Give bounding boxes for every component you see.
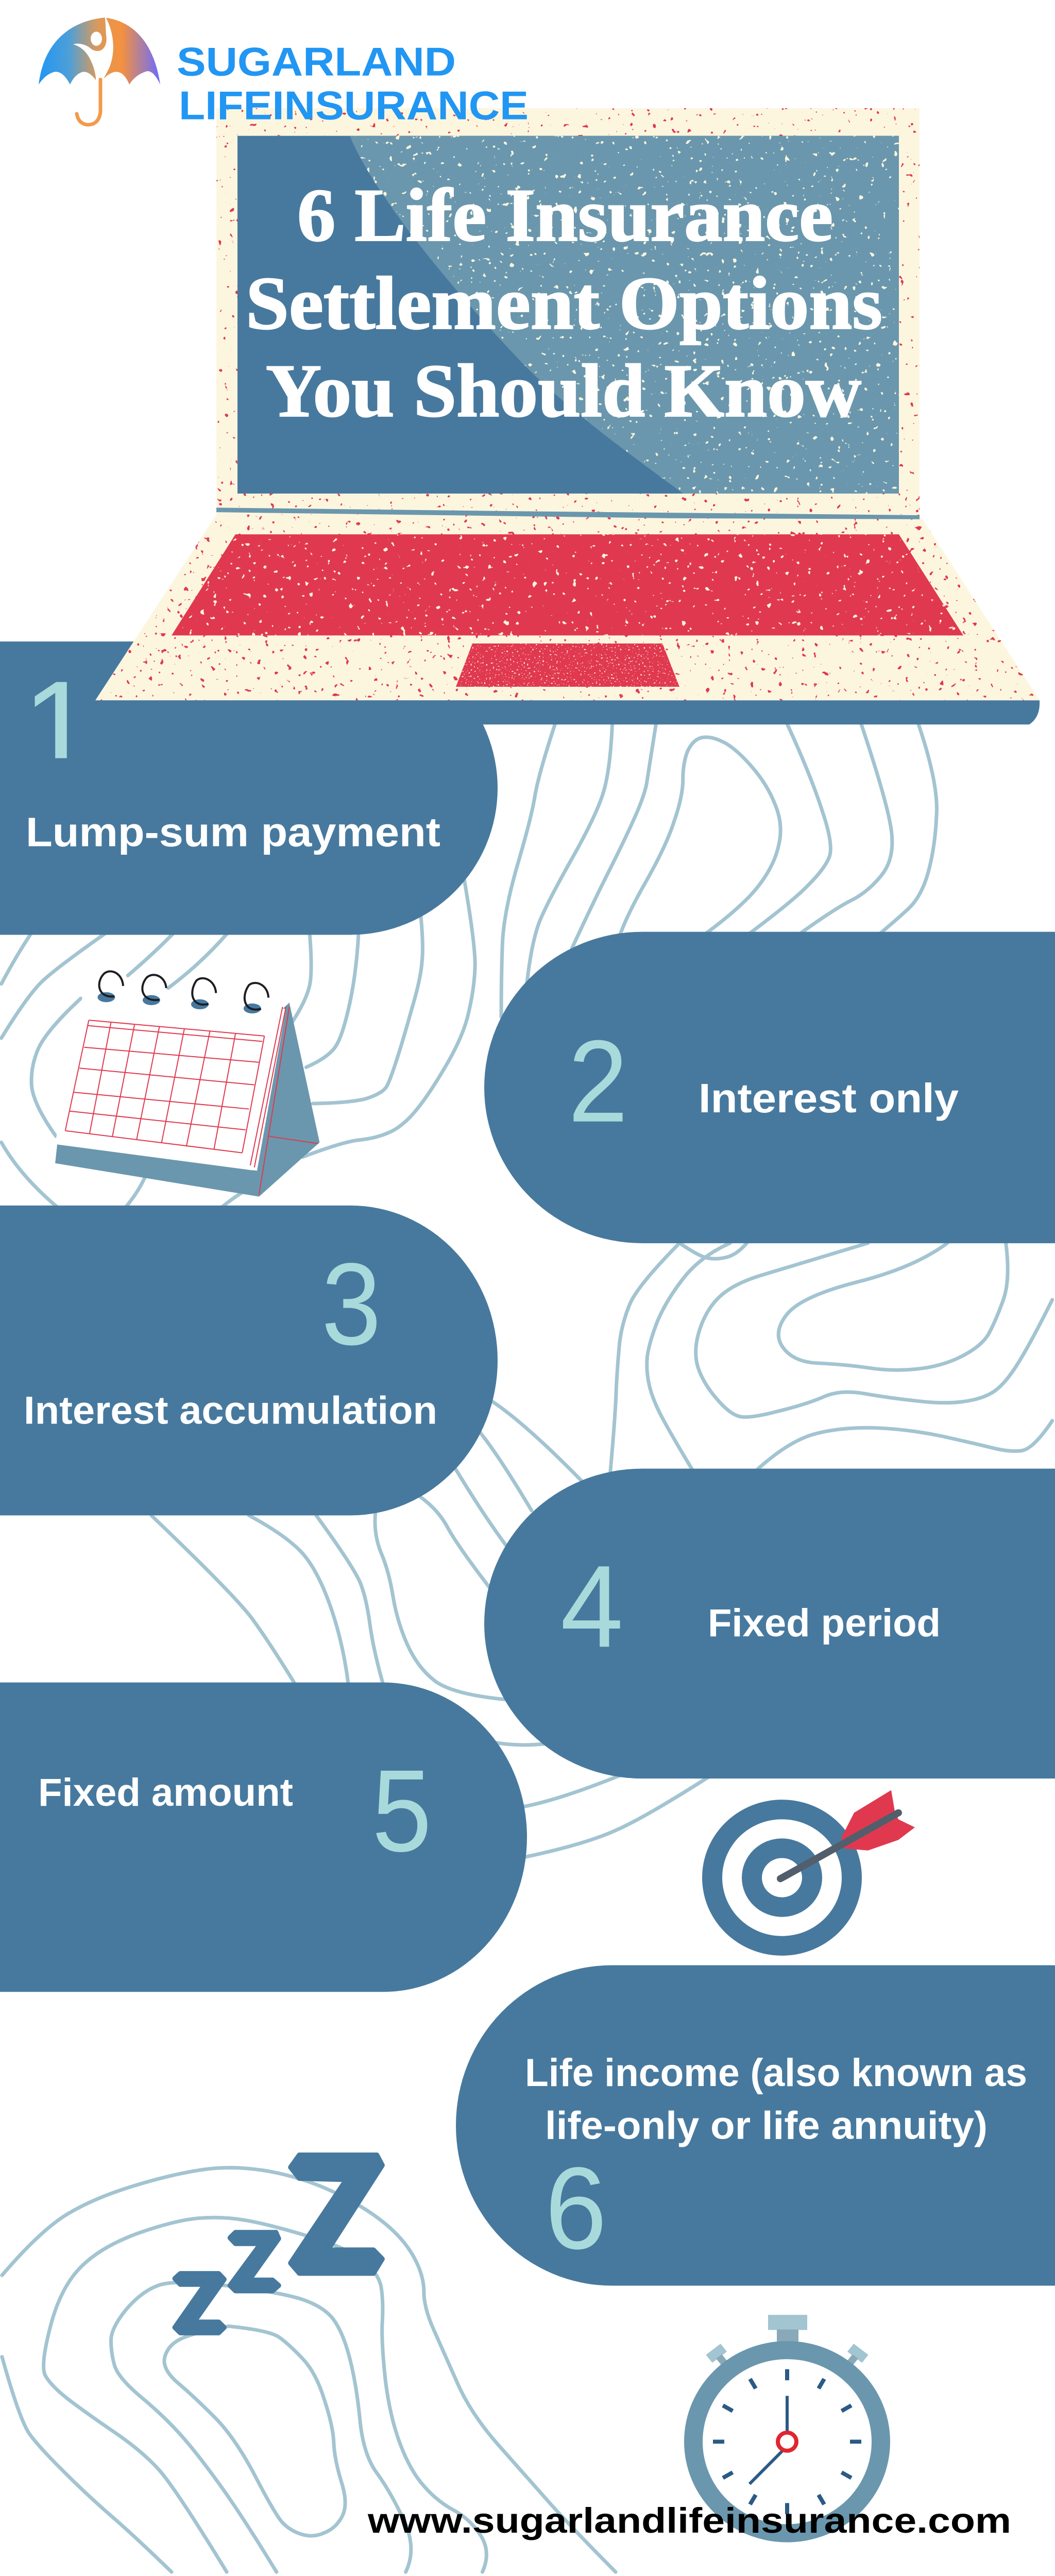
- stopwatch top button: [768, 2315, 807, 2330]
- number 4: 4: [560, 1541, 623, 1672]
- trackpad texture: [456, 643, 679, 687]
- stopwatch centre: [778, 2433, 796, 2451]
- calendar stand base: [55, 1144, 259, 1197]
- title line 2: Settlement Options: [246, 262, 882, 345]
- red speckles on base: [95, 515, 1040, 700]
- icon: umbrella with figure: [39, 15, 160, 125]
- panel 4: fixed period: [484, 1469, 1055, 1778]
- cream speckles on screen highlight: [350, 136, 899, 494]
- stopwatch side buttons: [706, 2344, 869, 2371]
- decorative contour lines: [2, 724, 1052, 2572]
- title: [246, 174, 882, 433]
- arrow fletching: [841, 1790, 915, 1851]
- logo: [39, 15, 529, 128]
- stopwatch ticks: [713, 2369, 861, 2514]
- number 1: 1: [22, 655, 95, 798]
- label: life income line 1: Life income (also known as: [525, 2051, 1027, 2095]
- cream speckles on keyboard: [172, 534, 963, 635]
- calendar stand side: [252, 1003, 319, 1197]
- icon: sleeping zzz: [175, 2155, 382, 2333]
- label: interest only: Interest only: [699, 1076, 959, 1122]
- label: fixed amount: Fixed amount: [38, 1771, 293, 1815]
- panel 1: lump-sum payment: [0, 641, 498, 935]
- laptop lid: [216, 108, 920, 518]
- number 5: 5: [372, 1745, 432, 1876]
- screen highlight: [350, 136, 899, 494]
- panel 6: life income: [456, 1965, 1055, 2286]
- icon: stopwatch: [684, 2315, 890, 2543]
- title line 3: You Should Know: [266, 349, 861, 433]
- laptop illustration: [93, 108, 1040, 724]
- panel 5: fixed amount: [0, 1683, 527, 1992]
- panel 2: interest only: [484, 932, 1055, 1243]
- number 3: 3: [321, 1239, 381, 1369]
- calendar grid: [65, 1007, 318, 1195]
- screen: [237, 136, 899, 494]
- panel 3: interest accumulation: [0, 1206, 498, 1515]
- label: fixed period: Fixed period: [708, 1601, 941, 1645]
- laptop base: [95, 515, 1040, 700]
- number 2: 2: [568, 1015, 628, 1146]
- stopwatch body: [684, 2341, 890, 2543]
- red speckles on lid: [216, 108, 920, 518]
- number 6: 6: [545, 2143, 607, 2274]
- keyboard: [172, 534, 963, 635]
- label: lump-sum payment: Lump-sum payment: [26, 809, 440, 855]
- logo text: sugarland: SUGARLAND: [177, 39, 456, 84]
- title line 1: 6 Life Insurance: [297, 174, 833, 257]
- calendar rings: [97, 971, 268, 1013]
- logo text: lifeinsurance: LIFEINSURANCE: [179, 82, 529, 128]
- stopwatch hands: [750, 2396, 787, 2484]
- website url: www.sugarlandlifeinsurance.com: [367, 2501, 1011, 2540]
- icon: desk calendar: [55, 971, 319, 1197]
- laptop front edge: [93, 700, 1040, 724]
- label: life income line 2: life-only or life annuity): [545, 2104, 988, 2147]
- label: interest accumulation: Interest accumulation: [24, 1388, 437, 1432]
- icon: target with arrow: [702, 1790, 915, 1956]
- hinge line: [216, 507, 920, 519]
- trackpad: [456, 643, 679, 687]
- arrow shaft: [780, 1813, 898, 1878]
- calendar page: [55, 998, 286, 1171]
